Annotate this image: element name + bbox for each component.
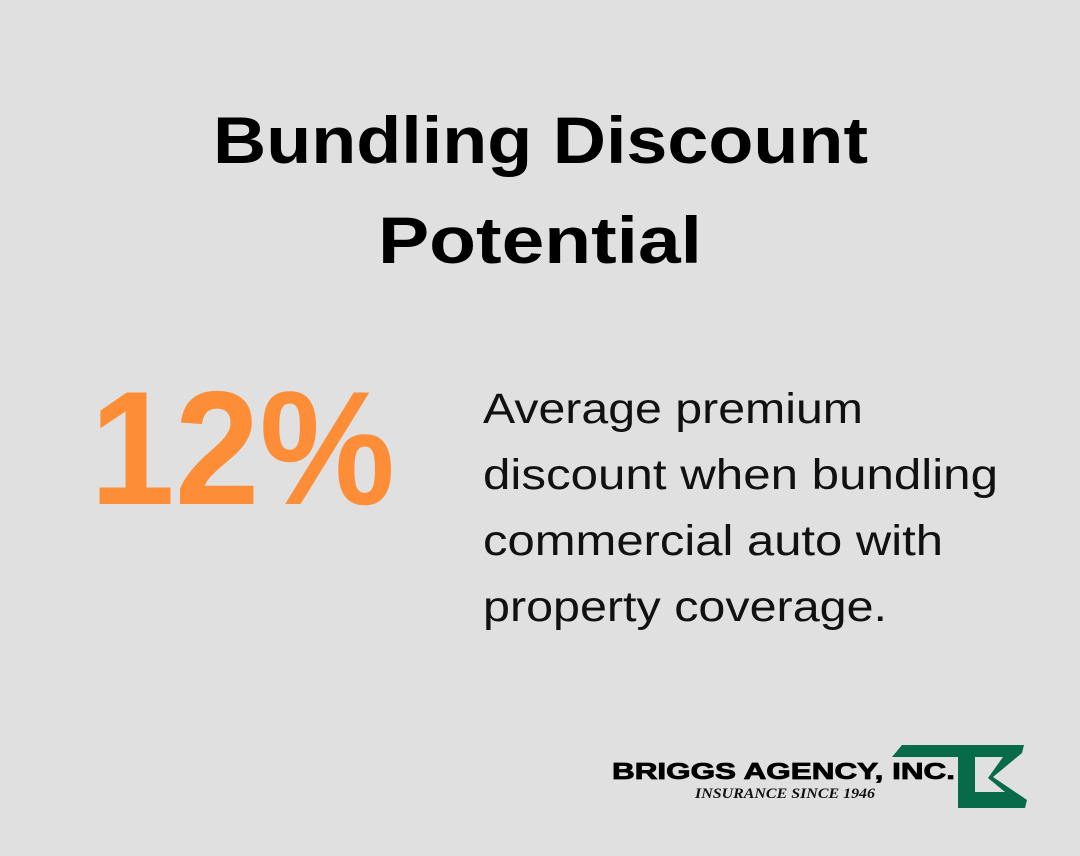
description text: discount when bundling	[483, 451, 998, 499]
icon: green logo mark	[892, 745, 1027, 808]
logo: Briggs Agency	[612, 745, 1027, 808]
title	[213, 103, 868, 277]
title: Bundling Discount	[213, 103, 868, 177]
description text: Average premium	[483, 385, 863, 433]
logo: Briggs Agency: BRIGGS AGENCY, INC.	[612, 758, 955, 784]
description text: property coverage.	[483, 583, 887, 631]
description text	[483, 385, 998, 631]
logo: Briggs Agency: INSURANCE SINCE 1946	[694, 786, 876, 802]
title: Potential	[378, 203, 702, 277]
description text: commercial auto with	[483, 517, 943, 565]
big stat: 12%: 12%	[90, 358, 395, 539]
